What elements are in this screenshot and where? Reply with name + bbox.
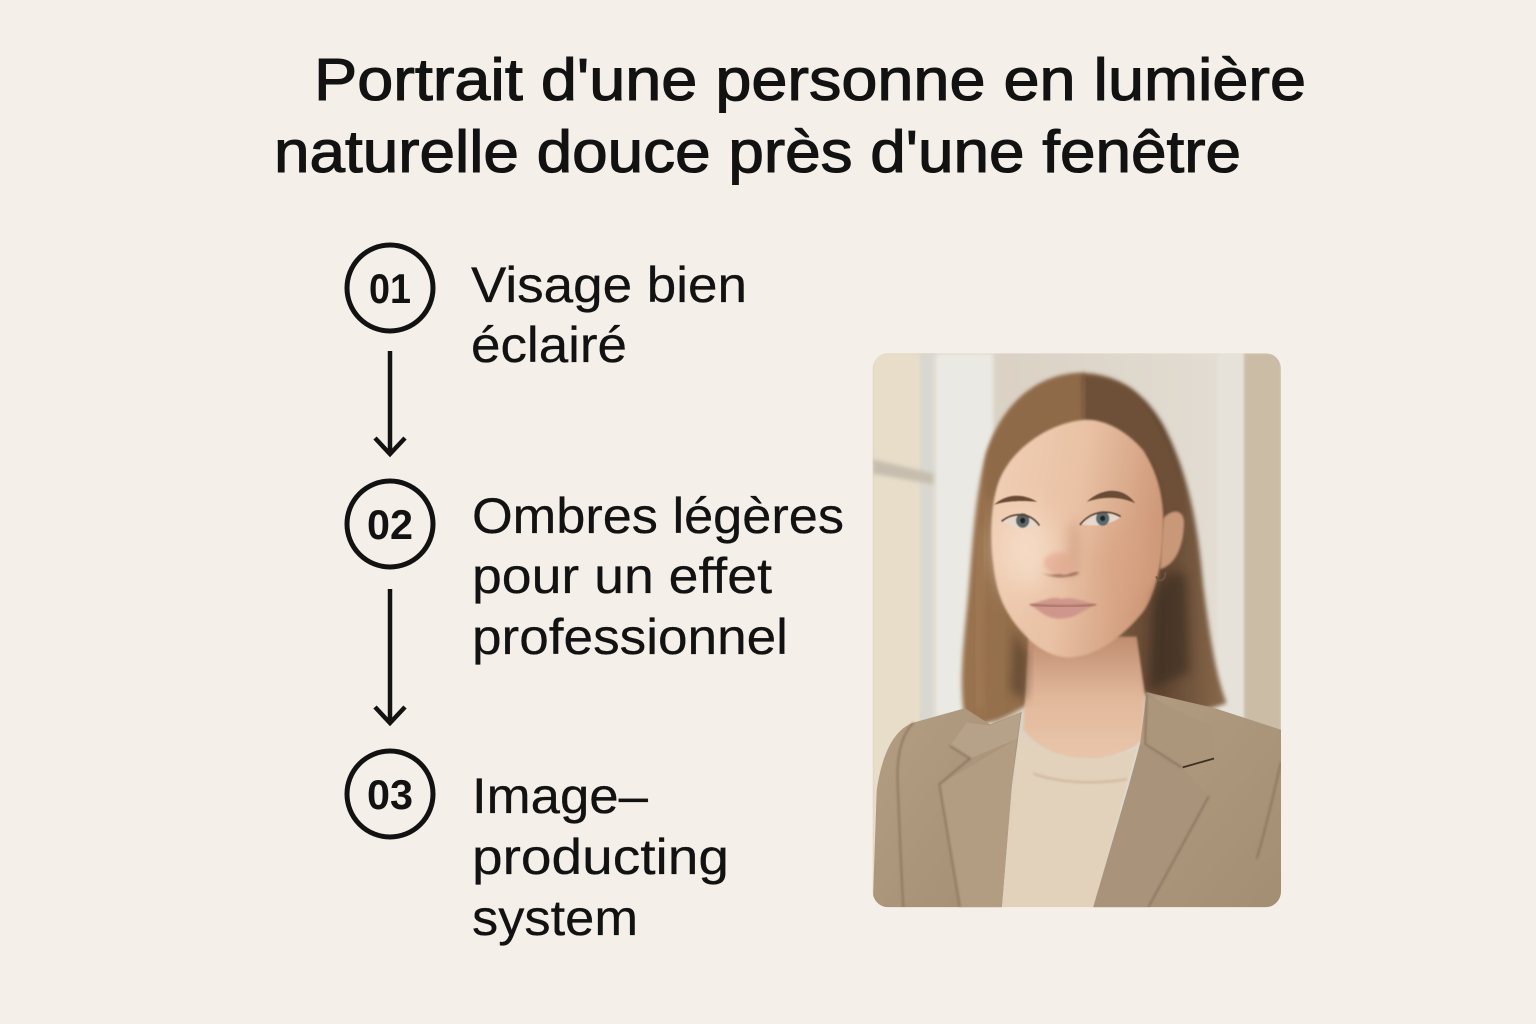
step 02 label	[472, 488, 844, 665]
lapel right	[1145, 692, 1214, 767]
arrow from step 02 to step 03	[375, 589, 405, 723]
hair shadow under ear	[1148, 572, 1190, 690]
lapel left	[950, 713, 1021, 758]
face shape	[991, 420, 1163, 657]
nose shadow	[1062, 524, 1082, 574]
step 03 label: system	[472, 890, 638, 946]
step 01 label	[471, 257, 747, 373]
lips	[1030, 598, 1096, 619]
step 01 badge	[347, 245, 433, 331]
title	[274, 47, 1306, 185]
ear	[1160, 511, 1184, 569]
step 01 badge: 01	[369, 265, 411, 312]
hair	[962, 373, 1227, 724]
step 03 badge	[347, 751, 433, 837]
step 03	[347, 751, 729, 946]
step 02 label: Ombres légères	[472, 488, 844, 544]
step 03 label: producting	[472, 829, 729, 885]
right eye	[1080, 511, 1121, 526]
step 01 label: Visage bien	[471, 257, 747, 313]
left eyebrow	[994, 496, 1037, 505]
step 02 badge: 02	[367, 501, 413, 548]
hair shadow at jaw	[1010, 629, 1028, 701]
title: Portrait d'une personne en lumière	[314, 47, 1306, 113]
neck	[1023, 637, 1145, 759]
step 01 label: éclairé	[471, 317, 627, 373]
left eye	[1002, 513, 1039, 528]
step 03 label	[472, 768, 729, 946]
step 03 label: Image–	[472, 768, 648, 824]
nose underside	[1042, 572, 1079, 577]
step 03 badge: 03	[367, 771, 413, 818]
nose tip	[1043, 552, 1066, 573]
step 02 label: pour un effet	[472, 548, 772, 604]
step 02 label: professionnel	[472, 609, 788, 665]
window and wall background	[873, 353, 1281, 907]
arrow from step 01 to step 02	[375, 351, 405, 454]
blazer seam shadows	[898, 694, 1281, 907]
cheek glow	[1000, 511, 1053, 590]
right eyebrow	[1087, 491, 1135, 503]
step 02 badge	[347, 481, 433, 567]
sweater	[1002, 732, 1137, 909]
portrait photo	[873, 353, 1281, 909]
title: naturelle douce près d'une fenêtre	[274, 119, 1241, 185]
earring	[1156, 572, 1165, 580]
right cheek warmth	[1100, 533, 1147, 597]
blazer	[873, 692, 1281, 909]
face	[991, 420, 1184, 657]
step 01	[347, 245, 747, 373]
step 02	[347, 481, 844, 665]
blazer body left	[873, 708, 1022, 909]
blazer body right	[1093, 692, 1281, 909]
